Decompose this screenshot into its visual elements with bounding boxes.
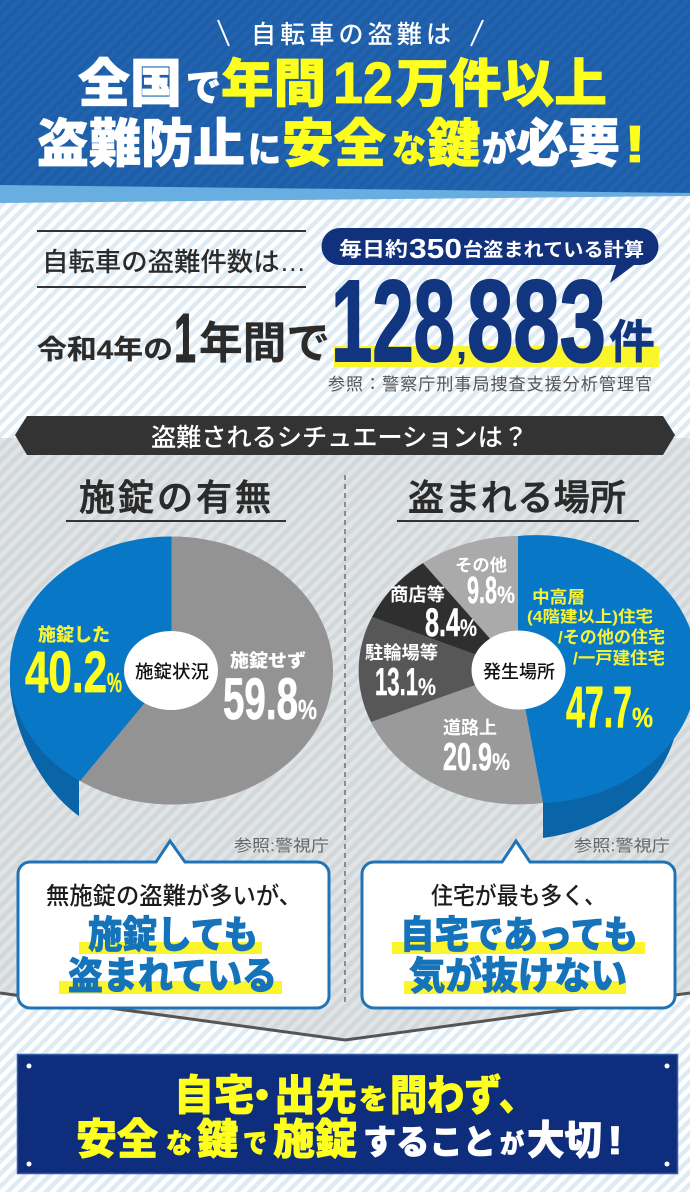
pie label: other [455,556,515,612]
conclusion line 2: 施錠 [273,1116,357,1163]
headline line 2: な [392,128,426,169]
headline line 1: 全国 [78,56,182,114]
pie chart: lock status [10,536,333,816]
pie centre label: 発生場所 [483,662,555,682]
big number [331,256,655,386]
callout: 自宅であっても [400,915,638,957]
conclusion line 1: 出先 [274,1072,357,1119]
yellow highlight bar [334,346,659,367]
pie label: housing: /一戸建住宅 [573,649,665,668]
headline line 2: 鍵 [427,116,480,174]
pie label: bicycle parking: 駐輪場等 [365,642,438,663]
lead-in text: 自転車の盗難件数は… [42,247,306,277]
pie label: bicycle parking: % [418,674,436,701]
period text: 1 [174,299,196,377]
headline line 2: 安全 [282,116,386,174]
pie label: on the road: 20.9 [443,736,492,779]
pie label: on the road: % [492,749,510,776]
headline line 1: 12 [333,51,393,116]
speech bubble: 台盗まれている計算 [463,238,644,261]
pie label: housing: 中高層 [532,587,585,607]
pie label: other: % [497,582,515,609]
headline line 1: 万件以上 [396,56,607,114]
section banner: 盗難されるシチュエーションは？ [151,424,528,452]
speech bubble [322,228,659,283]
callout: 無施錠の盗難が多いが、 [46,883,302,910]
callout [18,841,329,1008]
pie label: not locked: 施錠せず [230,650,306,671]
pie centre label: 施錠状況 [135,662,209,682]
big number: 128 [331,256,455,386]
pie label: shops: % [460,615,477,642]
headline line 2: 必要 [516,116,620,174]
panel: locked or not [10,477,333,1008]
pie label: housing: % [632,702,653,733]
conclusion line 2: すること [363,1124,496,1162]
callout [362,841,675,1008]
statistic panel [37,228,659,394]
pie label: shops [390,584,477,645]
conclusion line 2: 安全 [76,1116,158,1163]
pie label: locked: 施錠した [38,625,110,645]
pie label: shops: 商店等 [390,584,445,605]
conclusion line 1: 問わず、 [390,1072,536,1119]
header panel [0,0,690,203]
headline line 2: に [248,129,281,170]
headline line 2: 盗難防止 [37,116,245,174]
conclusion line 2: な [166,1129,192,1159]
pie label: housing: 47.7 [566,675,632,740]
heading: 施錠の有無 [79,477,271,518]
conclusion line 2 [76,1116,623,1163]
period text: 年間で [199,319,330,368]
pie label: housing [527,587,665,740]
pie label: not locked [223,650,317,732]
conclusion line 2: 大切 [527,1119,602,1163]
big number: 件 [609,316,655,368]
pie chart: location [359,535,690,838]
big number: 883 [467,256,606,386]
big number: , [456,323,467,367]
situation section panel [0,416,690,1040]
conclusion line 1: を [359,1084,388,1115]
headline line 1: 年間 [221,56,326,114]
pie label: shops: 8.4 [425,601,460,645]
pie label: housing: /その他の住宅 [558,628,665,647]
conclusion line 2: で [243,1129,267,1159]
conclusion line 2: ! [607,1119,623,1163]
speech bubble: 毎日約 [339,238,408,261]
source note: 参照:警視庁 [574,837,670,855]
callout: 気が抜けない [409,955,627,998]
headline line 1 [78,51,607,116]
pie label: not locked: % [298,694,317,725]
period text: 令和4年の [37,335,173,365]
headline line 2: が [482,128,516,169]
section banner [15,416,675,455]
conclusion line 2: 鍵 [197,1116,238,1163]
conclusion line 1: ・ [243,1076,281,1118]
headline line 1: で [186,68,221,110]
speech bubble: 350 [409,233,462,264]
conclusion line 2: が [500,1129,524,1159]
source note: 参照：警察庁刑事局捜査支援分析管理官 [328,375,652,394]
source note: 参照:警視庁 [234,837,329,855]
pie label: on the road: 道路上 [443,718,497,738]
conclusion banner [18,1054,678,1174]
headline line 2: ! [624,116,646,174]
pie label: other: 9.8 [467,570,497,612]
callout: 住宅が最も多く、 [431,883,606,910]
pie label: locked: % [107,667,122,698]
conclusion line 1: 自宅 [174,1072,254,1119]
callout: 施錠しても [88,915,258,957]
callout: 盗まれている [68,956,277,998]
pie label: other: その他 [455,556,507,575]
conclusion line 1 [174,1072,536,1119]
header kicker: 自転車の盗難は [251,21,451,49]
pie label: locked: 40.2 [25,640,107,705]
heading: 盗まれる場所 [408,477,626,518]
pie label: not locked: 59.8 [223,667,298,732]
pie label: bicycle parking [365,642,438,704]
period text [37,299,330,377]
pie label: on the road [443,718,510,779]
pie label: housing: (4階建以上)住宅 [527,607,653,626]
headline line 2 [37,116,646,174]
pie label: bicycle parking: 13.1 [375,661,418,704]
panel: theft location [359,477,690,1008]
